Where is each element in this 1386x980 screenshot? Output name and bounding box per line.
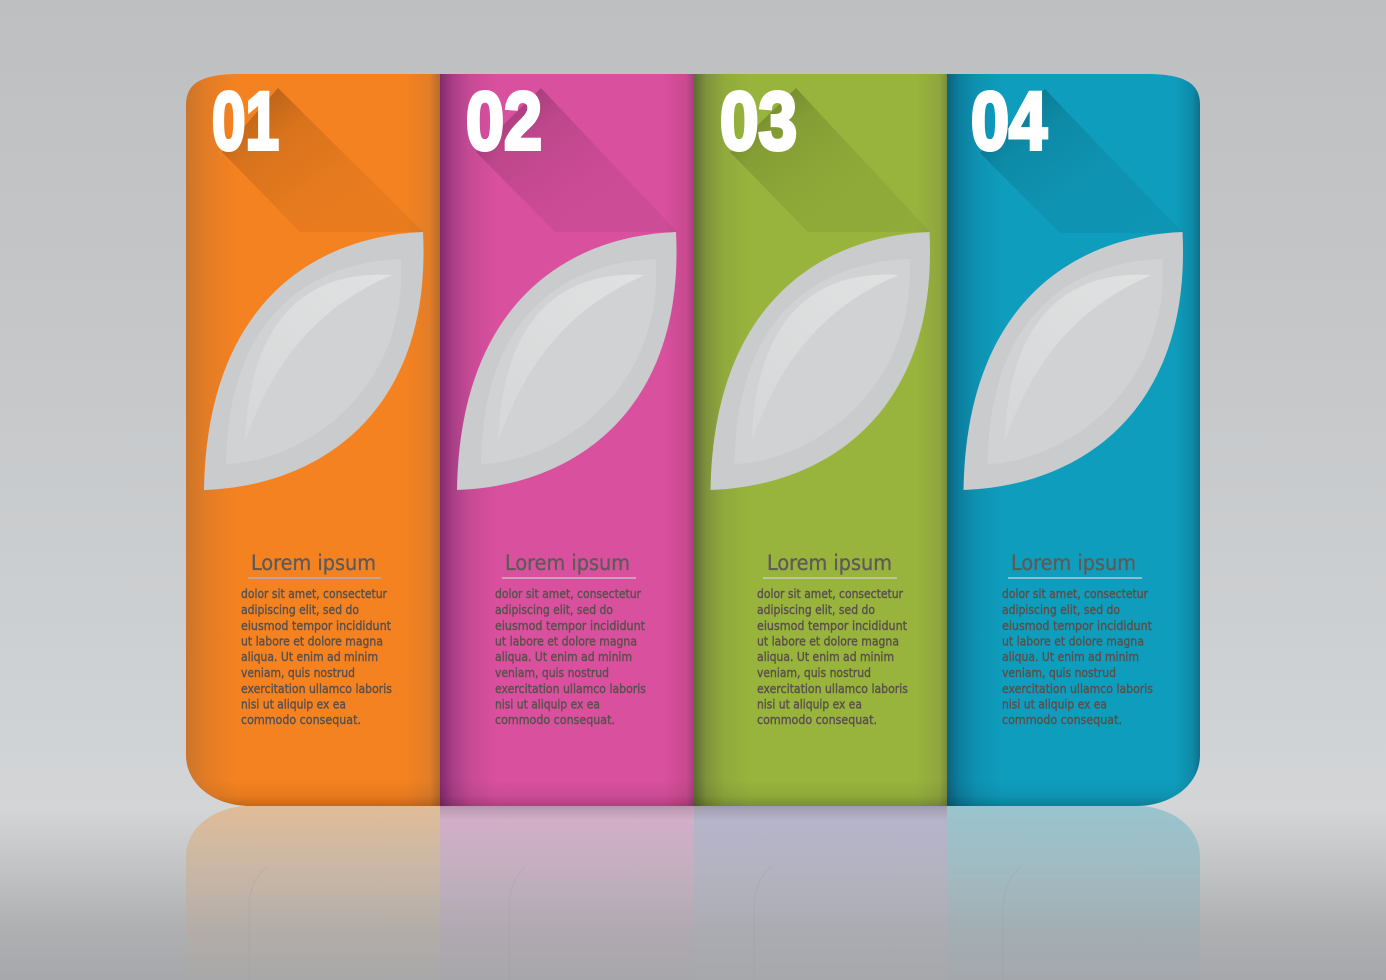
body text 03: exercitation ullamco laboris <box>757 681 908 696</box>
text block 04 <box>1002 551 1153 727</box>
body text 02: adipiscing elit, sed do <box>495 602 613 617</box>
heading 03: Lorem ipsum <box>767 551 892 575</box>
panel 01 background <box>186 74 440 806</box>
icon: leaf 01 <box>204 232 424 490</box>
body text 01: exercitation ullamco laboris <box>241 681 392 696</box>
number 04: 04 <box>971 76 1047 167</box>
text block 02 <box>495 551 646 727</box>
body text 02: ut labore et dolore magna <box>495 634 637 648</box>
body text 03: nisi ut aliquip ex ea <box>757 696 862 712</box>
body text 02: dolor sit amet, consectetur <box>495 586 642 601</box>
body text 04: dolor sit amet, consectetur <box>1002 586 1149 601</box>
body text 01: aliqua. Ut enim ad minim <box>241 649 378 664</box>
panel 04 background <box>947 74 1200 806</box>
text block 01 <box>241 551 392 727</box>
body text 04: commodo consequat. <box>1002 712 1122 727</box>
body text 02: exercitation ullamco laboris <box>495 681 646 696</box>
number 01: 01 <box>212 76 279 167</box>
body text 02: veniam, quis nostrud <box>495 665 609 680</box>
panel: 01 orange <box>186 74 440 806</box>
body text 03 <box>757 586 908 727</box>
heading 02: Lorem ipsum <box>505 551 630 575</box>
body text 04: ut labore et dolore magna <box>1002 634 1144 648</box>
icon: leaf 02 <box>457 232 677 490</box>
body text 04 <box>1002 586 1153 727</box>
body text 01: veniam, quis nostrud <box>241 665 355 680</box>
text block 03 <box>757 551 908 727</box>
body text 04: adipiscing elit, sed do <box>1002 602 1120 617</box>
panel 01 long shadow <box>222 88 423 232</box>
body text 02 <box>495 586 646 727</box>
icon: leaf 04 <box>964 232 1183 490</box>
heading 04: Lorem ipsum <box>1011 551 1136 575</box>
body text 02: eiusmod tempor incididunt <box>495 618 645 633</box>
bottom edge shading <box>204 789 1180 806</box>
number 02: 02 <box>466 76 542 167</box>
heading 01: Lorem ipsum <box>251 551 376 575</box>
body text 02: nisi ut aliquip ex ea <box>495 696 600 712</box>
body text 03: adipiscing elit, sed do <box>757 602 875 617</box>
number 03: 03 <box>720 76 797 167</box>
panel 02 background <box>440 74 694 806</box>
reflection of the panels <box>186 806 1200 980</box>
body text 03: aliqua. Ut enim ad minim <box>757 649 894 664</box>
body text 01: commodo consequat. <box>241 712 361 727</box>
panel 03 long shadow <box>730 88 930 232</box>
body text 01: ut labore et dolore magna <box>241 634 383 648</box>
body text 01: eiusmod tempor incididunt <box>241 618 391 633</box>
body text 04: aliqua. Ut enim ad minim <box>1002 649 1139 664</box>
body text 01: nisi ut aliquip ex ea <box>241 696 346 712</box>
body text 01: adipiscing elit, sed do <box>241 602 359 617</box>
panel: 04 blue <box>947 74 1200 806</box>
body text 04: veniam, quis nostrud <box>1002 665 1116 680</box>
body text 01: dolor sit amet, consectetur <box>241 586 388 601</box>
body text 04: eiusmod tempor incididunt <box>1002 618 1152 633</box>
panel 04 long shadow <box>980 89 1183 233</box>
body text 04: exercitation ullamco laboris <box>1002 681 1153 696</box>
icon: leaf 03 <box>710 232 930 490</box>
body text 02: aliqua. Ut enim ad minim <box>495 649 632 664</box>
body text 03: veniam, quis nostrud <box>757 665 871 680</box>
body text 03: eiusmod tempor incididunt <box>757 618 907 633</box>
body text 03: dolor sit amet, consectetur <box>757 586 904 601</box>
body text 03: commodo consequat. <box>757 712 877 727</box>
body text 04: nisi ut aliquip ex ea <box>1002 696 1107 712</box>
panel 02 long shadow <box>476 88 677 232</box>
panel: 03 green <box>694 74 947 806</box>
body text 01 <box>241 586 392 727</box>
body text 03: ut labore et dolore magna <box>757 634 899 648</box>
panel 03 background <box>694 74 947 806</box>
body text 02: commodo consequat. <box>495 712 615 727</box>
panel: 02 pink <box>440 74 694 806</box>
